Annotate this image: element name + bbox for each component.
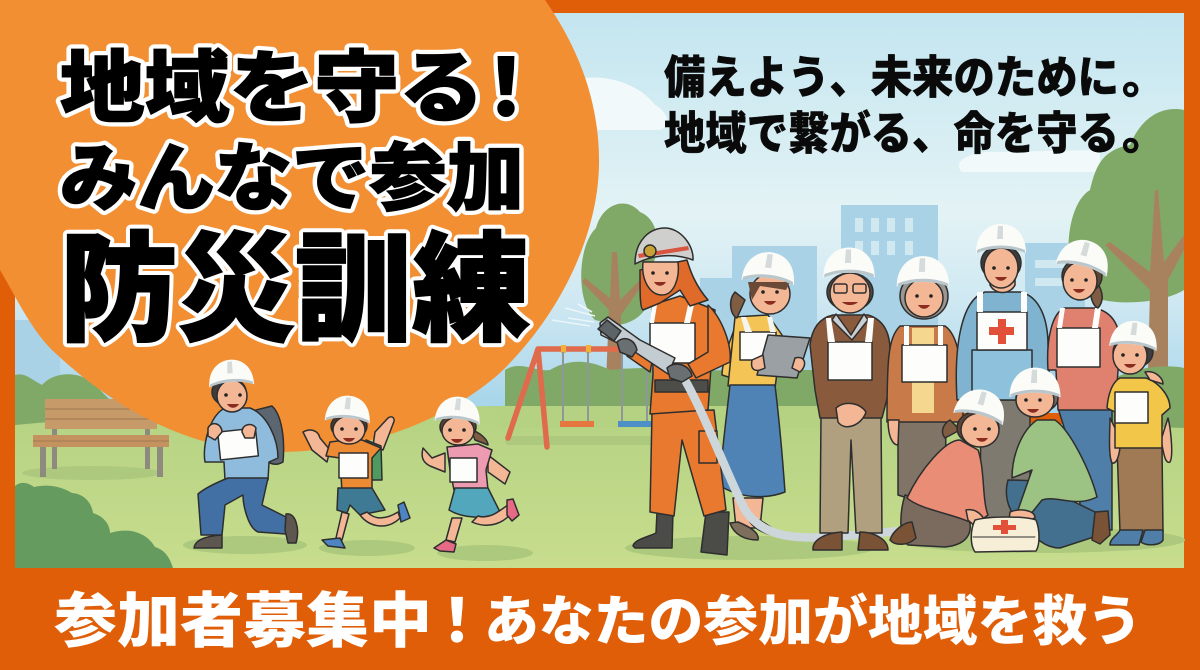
tagline: 。 xyxy=(1122,108,1167,159)
left tree xyxy=(581,203,657,382)
kneeling woman xyxy=(890,384,1010,547)
tagline xyxy=(664,52,1167,159)
firefighter xyxy=(598,228,730,555)
woman with ponytail xyxy=(1048,234,1120,530)
bottom banner text: 参加者募集中 xyxy=(54,588,432,655)
running child in orange shirt xyxy=(303,394,410,548)
title line 1: ！ xyxy=(467,44,545,132)
elderly man xyxy=(810,247,890,550)
sky xyxy=(15,13,1184,413)
title: 地域を守る!みんなで参加 防災訓練 xyxy=(60,44,545,357)
woman with clipboard xyxy=(721,250,810,540)
group running: man with backpack xyxy=(194,358,298,548)
running child in pink shirt xyxy=(422,395,519,552)
ground shadows xyxy=(22,436,1185,561)
title line 3: 防災訓練 xyxy=(60,225,530,357)
title line 2: みんなで参加 xyxy=(60,137,524,220)
bottom banner text: あなたの参加が地域を救う xyxy=(484,591,1142,652)
tagline: 備えよう、未来のために xyxy=(664,52,1119,103)
city buildings xyxy=(15,205,1085,408)
tall man with red cross bib xyxy=(956,224,1050,518)
title line 1: 地域を守る xyxy=(60,44,484,132)
clouds xyxy=(585,77,1100,172)
bush foreground xyxy=(15,483,173,568)
firefighter glove xyxy=(667,364,692,382)
title line 1: 地域を守る xyxy=(60,44,484,132)
tagline: 。 xyxy=(1122,52,1167,103)
orange title circle xyxy=(0,0,599,452)
first aid kit xyxy=(971,517,1039,552)
hose xyxy=(685,380,900,537)
right tree xyxy=(1069,109,1184,372)
title line 1: ！ xyxy=(467,44,545,132)
bottom banner text xyxy=(54,588,1142,655)
swing set xyxy=(508,345,652,447)
kneeling man xyxy=(1006,368,1110,548)
participants: firefighter with hose and group xyxy=(598,224,1172,555)
grass xyxy=(15,406,1184,568)
title line 3: 防災訓練 xyxy=(60,225,530,357)
hedges xyxy=(15,362,1184,435)
bottom banner text: ！ xyxy=(427,588,487,655)
water spray xyxy=(552,304,595,326)
bench xyxy=(33,399,169,477)
boy in yellow shirt xyxy=(1107,318,1172,545)
tagline: 地域で繋がる、命を守る xyxy=(664,108,1119,159)
title line 2: みんなで参加 xyxy=(60,137,524,220)
elderly woman xyxy=(887,256,963,510)
